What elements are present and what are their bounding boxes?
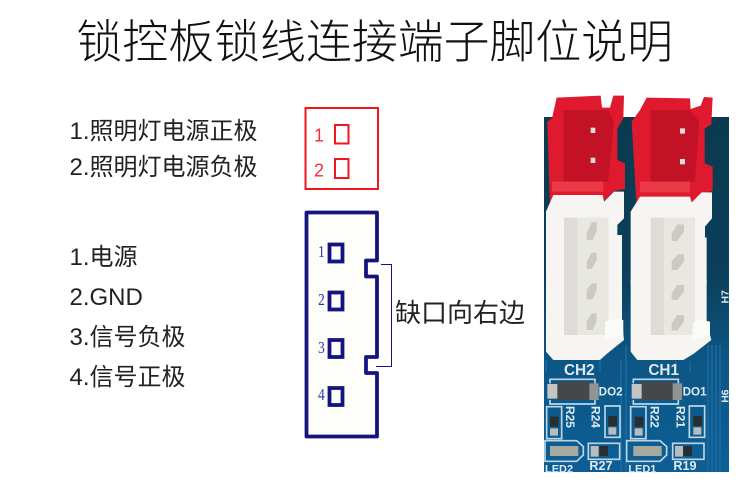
diagram: red two-pin connector: 2 — [314, 160, 324, 180]
connector: white lower left — [546, 280, 624, 360]
board labels: CH2 — [564, 362, 595, 379]
diagram: red two-pin connector: 1 — [314, 126, 324, 146]
bracket: notch span — [376, 264, 392, 366]
board labels: R25 — [563, 406, 577, 428]
board labels: CH1 — [648, 362, 679, 379]
parts: left channel outlines — [550, 379, 595, 404]
parts: diodes — [557, 382, 591, 400]
diagram: blue four-pin connector — [306, 212, 377, 436]
board labels: DO2 — [599, 385, 623, 398]
board: traces — [546, 345, 720, 472]
text: signal negative: 3.信号负极 — [70, 324, 186, 351]
connector: white left — [546, 192, 624, 285]
connector: red left — [547, 96, 625, 208]
parts: resistors — [550, 417, 559, 427]
board labels: R24 — [589, 406, 603, 428]
text: signal positive: 4.信号正极 — [70, 364, 186, 391]
board labels: R27 — [589, 459, 613, 473]
board labels — [545, 290, 731, 476]
connector: red right — [632, 97, 713, 208]
diagram: blue four-pin connector: 4 — [318, 386, 325, 404]
title: 锁控板锁线连接端子脚位说明 — [76, 16, 673, 68]
text: notch faces right: 缺口向右边 — [395, 298, 525, 328]
text: lamp power negative: 2.照明灯电源负极 — [70, 154, 258, 181]
diagram: blue four-pin connector: 3 — [318, 339, 325, 357]
text: GND: 2.GND — [70, 284, 143, 311]
board labels: R19 — [673, 459, 697, 473]
board — [544, 117, 729, 472]
photo: circuit board with connectors — [544, 96, 731, 476]
board labels: H6 — [720, 389, 731, 403]
board labels: DO1 — [683, 385, 707, 398]
board labels: R22 — [648, 406, 662, 428]
board labels: H7 — [720, 290, 731, 303]
parts: LEDs — [550, 446, 578, 456]
board labels: LED1 — [628, 464, 656, 476]
board labels: LED2 — [545, 464, 573, 476]
connector: white lower right — [631, 280, 711, 360]
text: lamp power positive: 1.照明灯电源正极 — [70, 118, 258, 145]
diagram: blue four-pin connector: 1 — [318, 243, 325, 261]
diagram: blue four-pin connector: 2 — [318, 291, 325, 309]
parts: right channel outlines — [633, 379, 678, 404]
diagram: red two-pin connector — [306, 108, 378, 189]
connector: white right — [631, 192, 712, 285]
text: power: 1.电源 — [70, 244, 138, 271]
board labels: R21 — [674, 406, 688, 428]
